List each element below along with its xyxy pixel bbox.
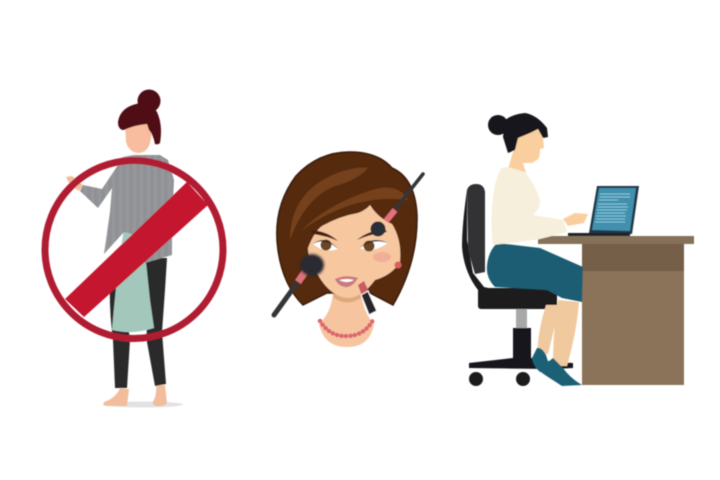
panel: woman working at desk (462, 113, 694, 386)
hand (66, 176, 83, 191)
neck and face (508, 126, 544, 173)
panel: prohibited casual woman (45, 90, 223, 408)
neck shadow (333, 292, 361, 302)
face and neck (125, 120, 152, 153)
face (308, 205, 400, 298)
neck and chest (319, 285, 374, 347)
leggings (110, 258, 167, 388)
arm and hand (563, 213, 588, 226)
hair (488, 113, 548, 153)
desk (538, 236, 694, 385)
cheek blush (373, 252, 391, 262)
floor shadow (103, 402, 183, 408)
prohibition sign (45, 160, 223, 338)
earring (394, 262, 402, 268)
hair (277, 152, 417, 305)
eyes (311, 229, 388, 252)
legs (537, 300, 579, 366)
grey sweater (80, 155, 174, 263)
mouth (335, 276, 358, 287)
right makeup brush (370, 174, 423, 236)
shoes (532, 348, 582, 386)
laptop (568, 186, 639, 236)
teal skirt (487, 243, 583, 302)
necklace (320, 320, 373, 336)
laptop screen text (595, 194, 630, 222)
feet (103, 385, 167, 406)
hair (118, 90, 161, 144)
teal dress (112, 228, 154, 332)
lipstick (358, 281, 377, 315)
hair highlight (290, 168, 408, 240)
cream blouse (492, 167, 567, 245)
office chair (462, 184, 573, 386)
panel: woman's head with makeup brushes (274, 152, 423, 347)
left makeup brush (274, 254, 324, 315)
